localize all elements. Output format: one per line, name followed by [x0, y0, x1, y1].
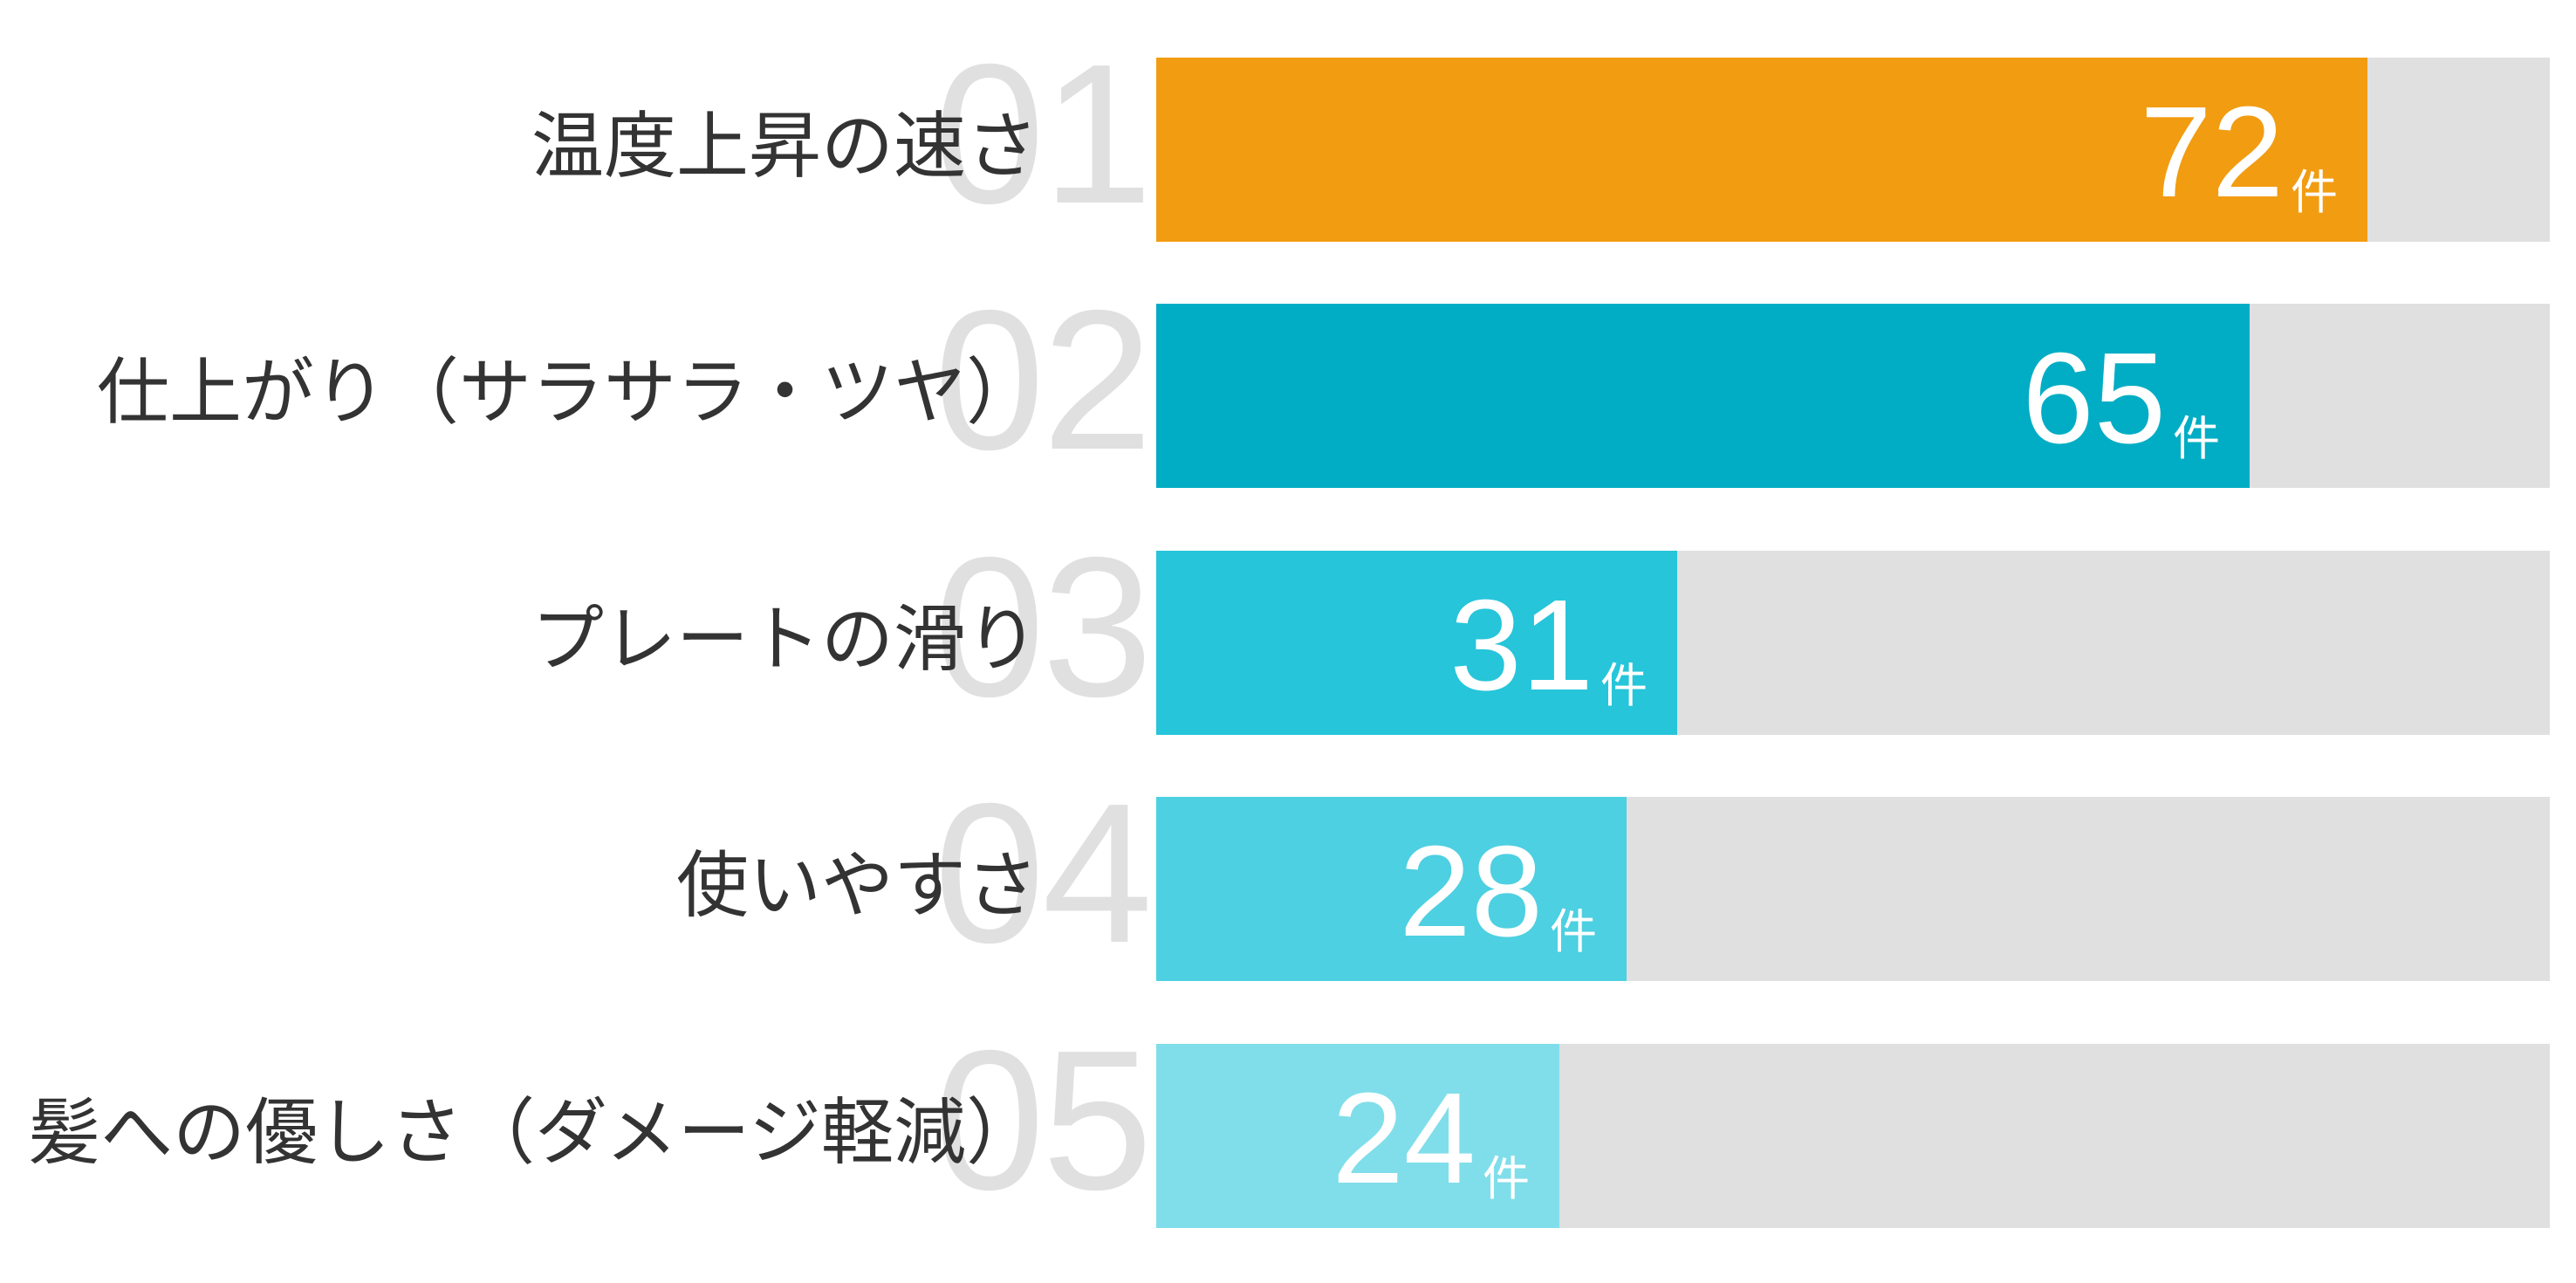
- value: 件: [1550, 906, 1597, 958]
- row 3: プレートの滑り: [531, 517, 2550, 738]
- bar track: [1156, 58, 2550, 242]
- value: 件: [1483, 1153, 1530, 1205]
- row 5: 髪への優しさ: [28, 1010, 2550, 1232]
- row 2: 仕上がり: [97, 270, 2550, 491]
- value: 31: [1449, 573, 1593, 717]
- rank number 04: 04: [934, 763, 1150, 985]
- bar track: [1156, 304, 2550, 488]
- rank number 01: 01: [934, 24, 1150, 245]
- rank number 03: 03: [934, 517, 1150, 738]
- label: 使いやすさ: [676, 845, 1038, 926]
- bar track: [1156, 797, 2550, 981]
- value: 件: [2291, 167, 2338, 219]
- label: 仕上がり（サラサラ・ツヤ）: [97, 352, 1038, 433]
- bar fill 28: [1156, 797, 1627, 981]
- bar track: [1156, 551, 2550, 735]
- label: 髪への優しさ（ダメージ軽減）: [28, 1092, 1038, 1173]
- row 1: 温度上昇の速さ: [531, 24, 2550, 245]
- bar fill 65: [1156, 304, 2250, 488]
- row 4: 使いやすさ: [676, 763, 2550, 985]
- bar track: [1156, 1044, 2550, 1228]
- value: 24: [1332, 1067, 1476, 1211]
- bar fill 24: [1156, 1044, 1559, 1228]
- rank number 02: 02: [934, 270, 1150, 491]
- value: 件: [2173, 413, 2220, 465]
- value: 72: [2140, 80, 2284, 224]
- value: 28: [1399, 820, 1543, 964]
- rank number 05: 05: [934, 1010, 1150, 1232]
- value: 65: [2022, 326, 2166, 470]
- label: 温度上昇の速さ: [531, 106, 1038, 187]
- bar fill 31: [1156, 551, 1677, 735]
- label: プレートの滑り: [531, 599, 1038, 680]
- bar fill 72: [1156, 58, 2367, 242]
- value: 件: [1600, 660, 1648, 712]
